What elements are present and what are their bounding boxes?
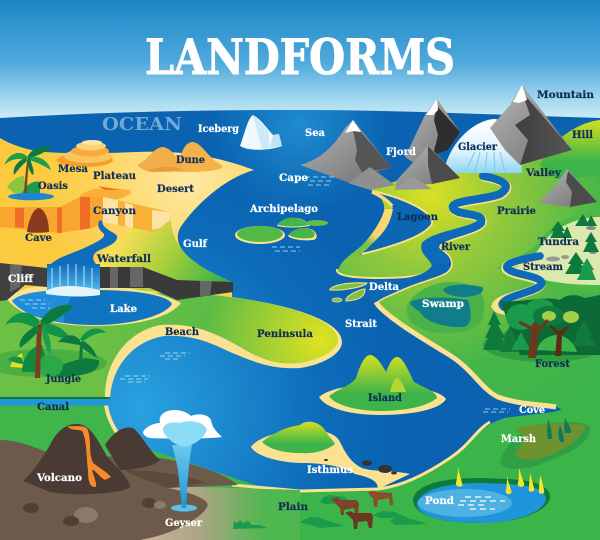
icon: valley mountain: [538, 169, 597, 207]
sky background: [0, 0, 600, 125]
panel: isthmus: [251, 422, 410, 489]
labels: land features (navy): Oasis: [38, 180, 68, 192]
icon: main volcano: [23, 424, 130, 494]
labels: water features (white): Lake: [110, 303, 137, 315]
labels: land features (navy): Lagoon: [397, 211, 438, 223]
panel: delta islets: [330, 283, 367, 302]
panel: archipelago: [235, 218, 328, 244]
panel: volcanic ground: [0, 440, 300, 540]
ocean label: OCEAN: [102, 114, 182, 135]
delta sand edge: [337, 266, 432, 278]
labels: water features (white): Gulf: [183, 238, 208, 250]
labels: land features (navy): Plain: [278, 501, 308, 513]
icon: grass tufts: [233, 495, 427, 529]
icon: stream: [496, 257, 541, 310]
icon: mountain front: [394, 145, 460, 190]
labels: land features (navy): Forest: [535, 358, 570, 370]
icon: river: [453, 176, 507, 223]
labels: water features (white): Pond: [425, 495, 455, 507]
icon: pond: [413, 466, 550, 523]
icon: mountain far left: [300, 120, 395, 190]
right shore sand: [376, 302, 556, 407]
ocean: [0, 110, 600, 540]
icon: rocks: [23, 498, 166, 526]
labels: land features (navy): Tundra: [538, 236, 579, 248]
icon: mountain tall rear: [405, 99, 460, 165]
icon: canyon river: [47, 220, 117, 268]
labels: land features (navy): Plateau: [93, 170, 136, 182]
labels: water features (white): Volcano: [36, 472, 82, 484]
icon: canyon plateau: [0, 186, 170, 233]
panel: right land: [200, 130, 600, 540]
panel: swamp: [407, 282, 484, 333]
icon: oasis palm: [4, 146, 54, 200]
icon: jungle: [0, 305, 107, 378]
labels: land features (navy): Mountain: [537, 89, 594, 101]
green slope beside waterfall: [96, 215, 232, 292]
labels: water features (white): Archipelago: [249, 203, 318, 215]
labels: land features (navy): [25, 89, 594, 513]
panel: lagoon: [350, 191, 432, 257]
panel: tundra: [497, 212, 600, 292]
labels: land features (navy): Prairie: [497, 205, 536, 217]
labels: water features (white): Cove: [519, 404, 545, 416]
icon: cave: [27, 208, 49, 233]
labels: water features (white): Strait: [345, 318, 377, 330]
labels: land features (navy): Dune: [176, 154, 205, 166]
icon: cows: [331, 491, 393, 529]
title: LANDFORMS: [145, 28, 455, 86]
panel: forest: [483, 295, 600, 362]
icon: small volcano: [105, 428, 160, 470]
icon: dunes: [137, 142, 223, 172]
labels: land features (navy): Valley: [525, 167, 562, 179]
labels: land features (navy): River: [441, 241, 470, 253]
icon: big mountain: [490, 85, 572, 165]
river lower channel: [421, 220, 486, 266]
icon: water ripples: [20, 177, 510, 412]
panel: marsh: [500, 417, 590, 469]
icon: cliffs: [0, 263, 233, 301]
panel: desert land: [0, 138, 254, 300]
labels: land features (navy): Stream: [523, 261, 563, 273]
labels: land features (navy): Cave: [25, 232, 52, 244]
panel: left land with peninsula and beach: [0, 290, 342, 398]
labels: land features (navy): Canal: [37, 401, 69, 413]
labels: water features (white): Cliff: [8, 273, 34, 285]
labels: water features (white): Iceberg: [198, 123, 240, 135]
river right bank sand: [378, 224, 486, 302]
labels: water features (white): Sea: [305, 127, 325, 139]
labels: water features (white): Delta: [369, 281, 399, 293]
labels: land features (navy): Hill: [572, 129, 593, 141]
icon: waterfall: [46, 264, 100, 297]
river mouth: [340, 263, 452, 303]
labels: land features (navy): Mesa: [58, 163, 88, 175]
icon: geyser: [143, 410, 222, 512]
icon: lake: [7, 286, 181, 326]
icon: iceberg: [240, 115, 282, 150]
labels: land features (navy): Peninsula: [257, 328, 313, 340]
labels: land features (navy): Beach: [165, 326, 199, 338]
icon: glacier: [443, 119, 522, 173]
labels: water features (white): Cape: [279, 172, 308, 184]
labels: land features (navy): Waterfall: [96, 253, 151, 265]
labels: water features (white): Fjord: [386, 146, 417, 158]
labels: water features (white): Isthmus: [307, 464, 353, 476]
icon: pond ripples: [458, 497, 505, 509]
panel: island: [319, 355, 446, 415]
icon: mesa: [57, 140, 113, 167]
labels: land features (navy): Desert: [157, 183, 194, 195]
labels: water features (white): Geyser: [165, 517, 202, 529]
labels: water features (white): Marsh: [501, 433, 536, 445]
labels: land features (navy): Jungle: [45, 373, 81, 385]
icon: hill: [540, 120, 600, 180]
panel: bottom-left land: [0, 405, 300, 540]
labels: land features (navy): Canyon: [93, 205, 136, 217]
icon: canal: [0, 397, 110, 406]
labels: land features (navy): Island: [368, 392, 403, 404]
labels: water features (white): [8, 123, 545, 529]
bottom shore sand: [232, 422, 490, 491]
labels: land features (navy): Glacier: [458, 141, 497, 153]
labels: water features (white): Swamp: [422, 298, 464, 310]
